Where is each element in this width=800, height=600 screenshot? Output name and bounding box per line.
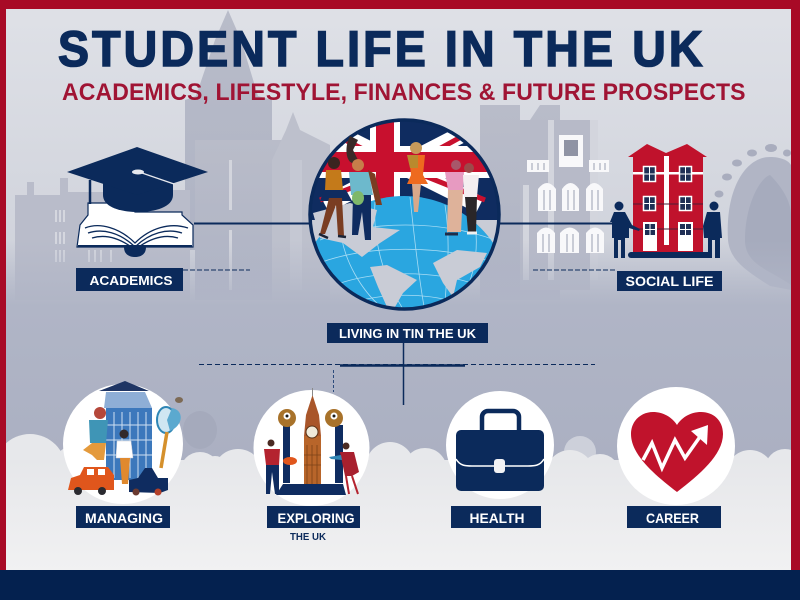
- label: health: [451, 506, 541, 528]
- globe with flag and students: [308, 118, 501, 311]
- label: career: CAREER: [646, 510, 699, 526]
- label: social life: [617, 271, 722, 291]
- windows: [644, 166, 692, 210]
- icon: briefcase: [446, 391, 554, 499]
- icon: managing: [63, 381, 183, 504]
- label: managing: MANAGING: [85, 510, 163, 526]
- label: health: HEALTH: [470, 510, 524, 526]
- faint windows: [55, 210, 112, 262]
- land: [313, 203, 487, 307]
- people: [614, 202, 624, 210]
- label: academics: ACADEMICS: [90, 273, 173, 288]
- subtitle: ACADEMICS, LIFESTYLE, FINANCES & FUTURE PROSPECTS: [62, 79, 746, 105]
- label: academics: [76, 268, 183, 291]
- pale pillars: [229, 120, 598, 290]
- ground haze: [0, 240, 800, 460]
- grid: [320, 197, 495, 312]
- icon: university arches: [527, 135, 609, 253]
- London Eye silhouette: [714, 144, 791, 290]
- skyline silhouette: [15, 10, 590, 300]
- label: exploring: EXPLORING: [278, 510, 355, 526]
- label: living in the UK: LIVING IN TIN THE UK: [339, 326, 477, 341]
- clouds: [0, 411, 800, 570]
- doors: [643, 222, 657, 251]
- icon: graduation cap on book: [67, 147, 208, 257]
- text: the UK: THE UK: [290, 532, 327, 543]
- icon: red student house with two people: [610, 144, 722, 258]
- footer band: [0, 570, 800, 600]
- label: living in the UK: [327, 323, 488, 343]
- label: managing: [76, 506, 170, 528]
- students: [319, 136, 479, 240]
- title: STUDENT LIFE IN THE UK: [58, 21, 703, 77]
- label: career: [627, 506, 721, 528]
- icon: exploring big ben: [254, 388, 370, 506]
- label: social life: SOCIAL LIFE: [626, 273, 714, 289]
- ocean: [316, 196, 493, 308]
- flag: [312, 122, 498, 220]
- connector lines: [183, 224, 617, 405]
- label: exploring: [267, 506, 360, 528]
- icon: heart with rising arrow: [617, 387, 735, 505]
